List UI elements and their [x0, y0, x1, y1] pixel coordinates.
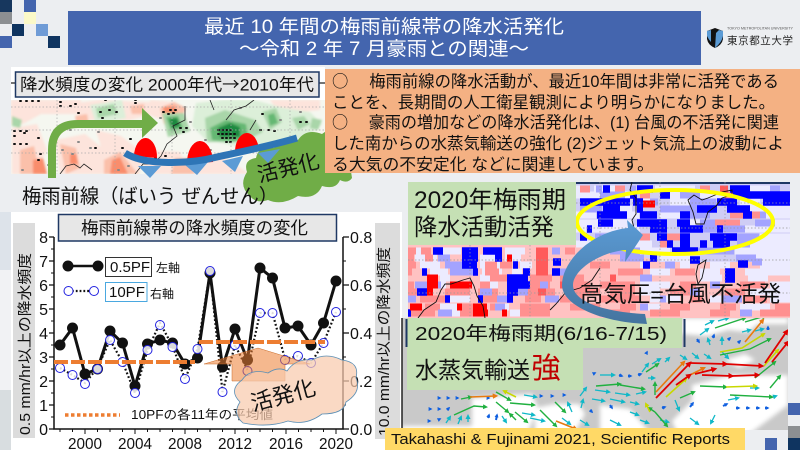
- legend: [62, 258, 273, 422]
- axis numbers: 0.4: [350, 326, 372, 343]
- decorative squares: bottom right: [765, 403, 800, 450]
- panel: time series chart: [11, 212, 402, 450]
- axis numbers: 3: [39, 350, 48, 367]
- vector arrows: yellow: [504, 334, 778, 412]
- panel: explanation text: [325, 68, 800, 174]
- legend: 0.5PF: [110, 259, 150, 276]
- panel: explanation text: ○ 梅雨前線の降水活動が、最近10年間は非常に活発である: [332, 68, 779, 92]
- label: 2020 baiu active: 降水活動活発: [414, 214, 554, 240]
- arrow: green moisture flow: [48, 108, 158, 178]
- legend: 10PFの各11年の平均値: [131, 407, 273, 422]
- medium blue cells: [408, 189, 780, 313]
- front line: [125, 138, 297, 163]
- citation: Takahashi & Fujinami 2021, Scientific Reports: [391, 432, 730, 448]
- warm front half circles: [134, 133, 259, 164]
- label: high pressure = typhoon inactive: 高気圧=台風不活発: [580, 282, 781, 307]
- label: baiu front: 梅雨前線（ばいう ぜんせん）: [22, 186, 278, 208]
- callout label: active: 活発化: [248, 375, 318, 416]
- axis numbers: 0.6: [350, 278, 372, 295]
- label: strong moisture transport: [407, 348, 583, 390]
- axis numbers: 6: [39, 278, 48, 295]
- label: 2020 baiu active: 2020年梅雨期: [414, 187, 566, 214]
- title banner: 最近 10 年間の梅雨前線帯の降水活発化: [204, 16, 564, 38]
- vector arrows: green: [454, 316, 780, 426]
- pale cells: [415, 189, 790, 313]
- legend: 右軸: [150, 286, 174, 301]
- right axis label: [375, 223, 400, 439]
- left axis label: [13, 223, 35, 438]
- vector arrows: red: [656, 331, 788, 398]
- mid red cells: [536, 189, 728, 292]
- chart title: [58, 214, 336, 241]
- 0.5PF solid series: [54, 262, 342, 392]
- arrow: curved blue (high pressure flow): [562, 220, 647, 324]
- label: 2020 baiu period: [406, 318, 684, 348]
- logo: Tokyo Metropolitan University: 東京都立大学: [727, 34, 793, 47]
- label: active (green cloud): 活発化: [255, 150, 322, 187]
- chart title: 梅雨前線帯の降水頻度の変化: [81, 218, 308, 238]
- axis numbers: 0.2: [350, 374, 372, 391]
- axis numbers: 7: [39, 254, 48, 271]
- light red cells: [408, 189, 790, 313]
- label: strong moisture transport: 強: [531, 352, 561, 385]
- side decorative strips: [0, 212, 11, 450]
- panel: 2020 precipitation anomaly map: [408, 182, 790, 318]
- label: strong moisture transport: 水蒸気輸送: [415, 357, 530, 383]
- axis numbers: 2: [39, 374, 48, 391]
- axis numbers: 8: [39, 230, 48, 247]
- panel: moisture transport vector map: [402, 316, 788, 435]
- strong blue cells: [408, 189, 790, 313]
- panel: explanation text: ことを、長期間の人工衛星観測により明らかになりました。: [332, 94, 775, 112]
- front: baiu front symbols: [125, 133, 297, 178]
- label: 2020 baiu period: 2020年梅雨期(6/16-7/15): [415, 323, 667, 344]
- title banner: 〜令和 2 年 7 月豪雨との関連〜: [239, 38, 529, 60]
- callout arrow shape: [204, 348, 310, 381]
- panel: explanation text: した南からの水蒸気輸送の強化 (2)ジェット気流上の波動によ: [332, 135, 784, 153]
- heading: precipitation frequency change: 降水頻度の変化 2000年代 →2010年代: [20, 70, 314, 96]
- logo: Tokyo Metropolitan University: [707, 26, 794, 48]
- legend: 10PF: [109, 284, 145, 301]
- cloud: active (green): [243, 129, 352, 202]
- decorative squares: top left: [0, 0, 60, 48]
- left axis label: 0.5 mm/hr以上の降水頻度: [17, 253, 34, 435]
- axes: [49, 237, 349, 434]
- panel: explanation text: る大気の不安定化 などに関連しています。: [332, 156, 654, 174]
- axis numbers: 0.8: [350, 230, 372, 247]
- axis numbers: [39, 230, 372, 450]
- legend: 左軸: [156, 260, 180, 275]
- axis numbers: 0: [39, 422, 48, 439]
- 10PF dotted series: [60, 272, 336, 393]
- axis numbers: 4: [39, 326, 48, 343]
- citation: [385, 428, 745, 450]
- panel: rain frequency change map: [11, 67, 325, 174]
- panel: explanation text: ○ 豪雨の増加などの降水活発化は、(1) 台風の不活発に関連: [332, 109, 779, 133]
- cold front triangles: [138, 149, 280, 178]
- 10PF period mean lines: [54, 342, 325, 362]
- 10PF markers: [56, 266, 340, 398]
- strong red cells: [410, 204, 655, 313]
- dots: [14, 100, 307, 162]
- axis numbers: 1: [39, 398, 48, 415]
- highlight ellipse: active area: [577, 190, 773, 254]
- axis numbers: 5: [39, 302, 48, 319]
- label: 2020 baiu active: [408, 182, 576, 245]
- vector arrows: cyan: [446, 318, 776, 425]
- vector arrows: orange: [470, 320, 763, 429]
- callout cloud: active: [234, 356, 358, 425]
- coastlines: [418, 182, 706, 318]
- vector arrows: blue: [428, 327, 768, 421]
- title banner: [68, 11, 701, 65]
- map: frequency anomalies: [11, 100, 325, 174]
- logo: Tokyo Metropolitan University: TOKYO METROPOLITAN UNIVERSITY: [727, 26, 794, 30]
- right axis label: 10.0 mm/hr以上の降水頻度: [376, 247, 393, 436]
- axis numbers: 0.0: [350, 422, 372, 439]
